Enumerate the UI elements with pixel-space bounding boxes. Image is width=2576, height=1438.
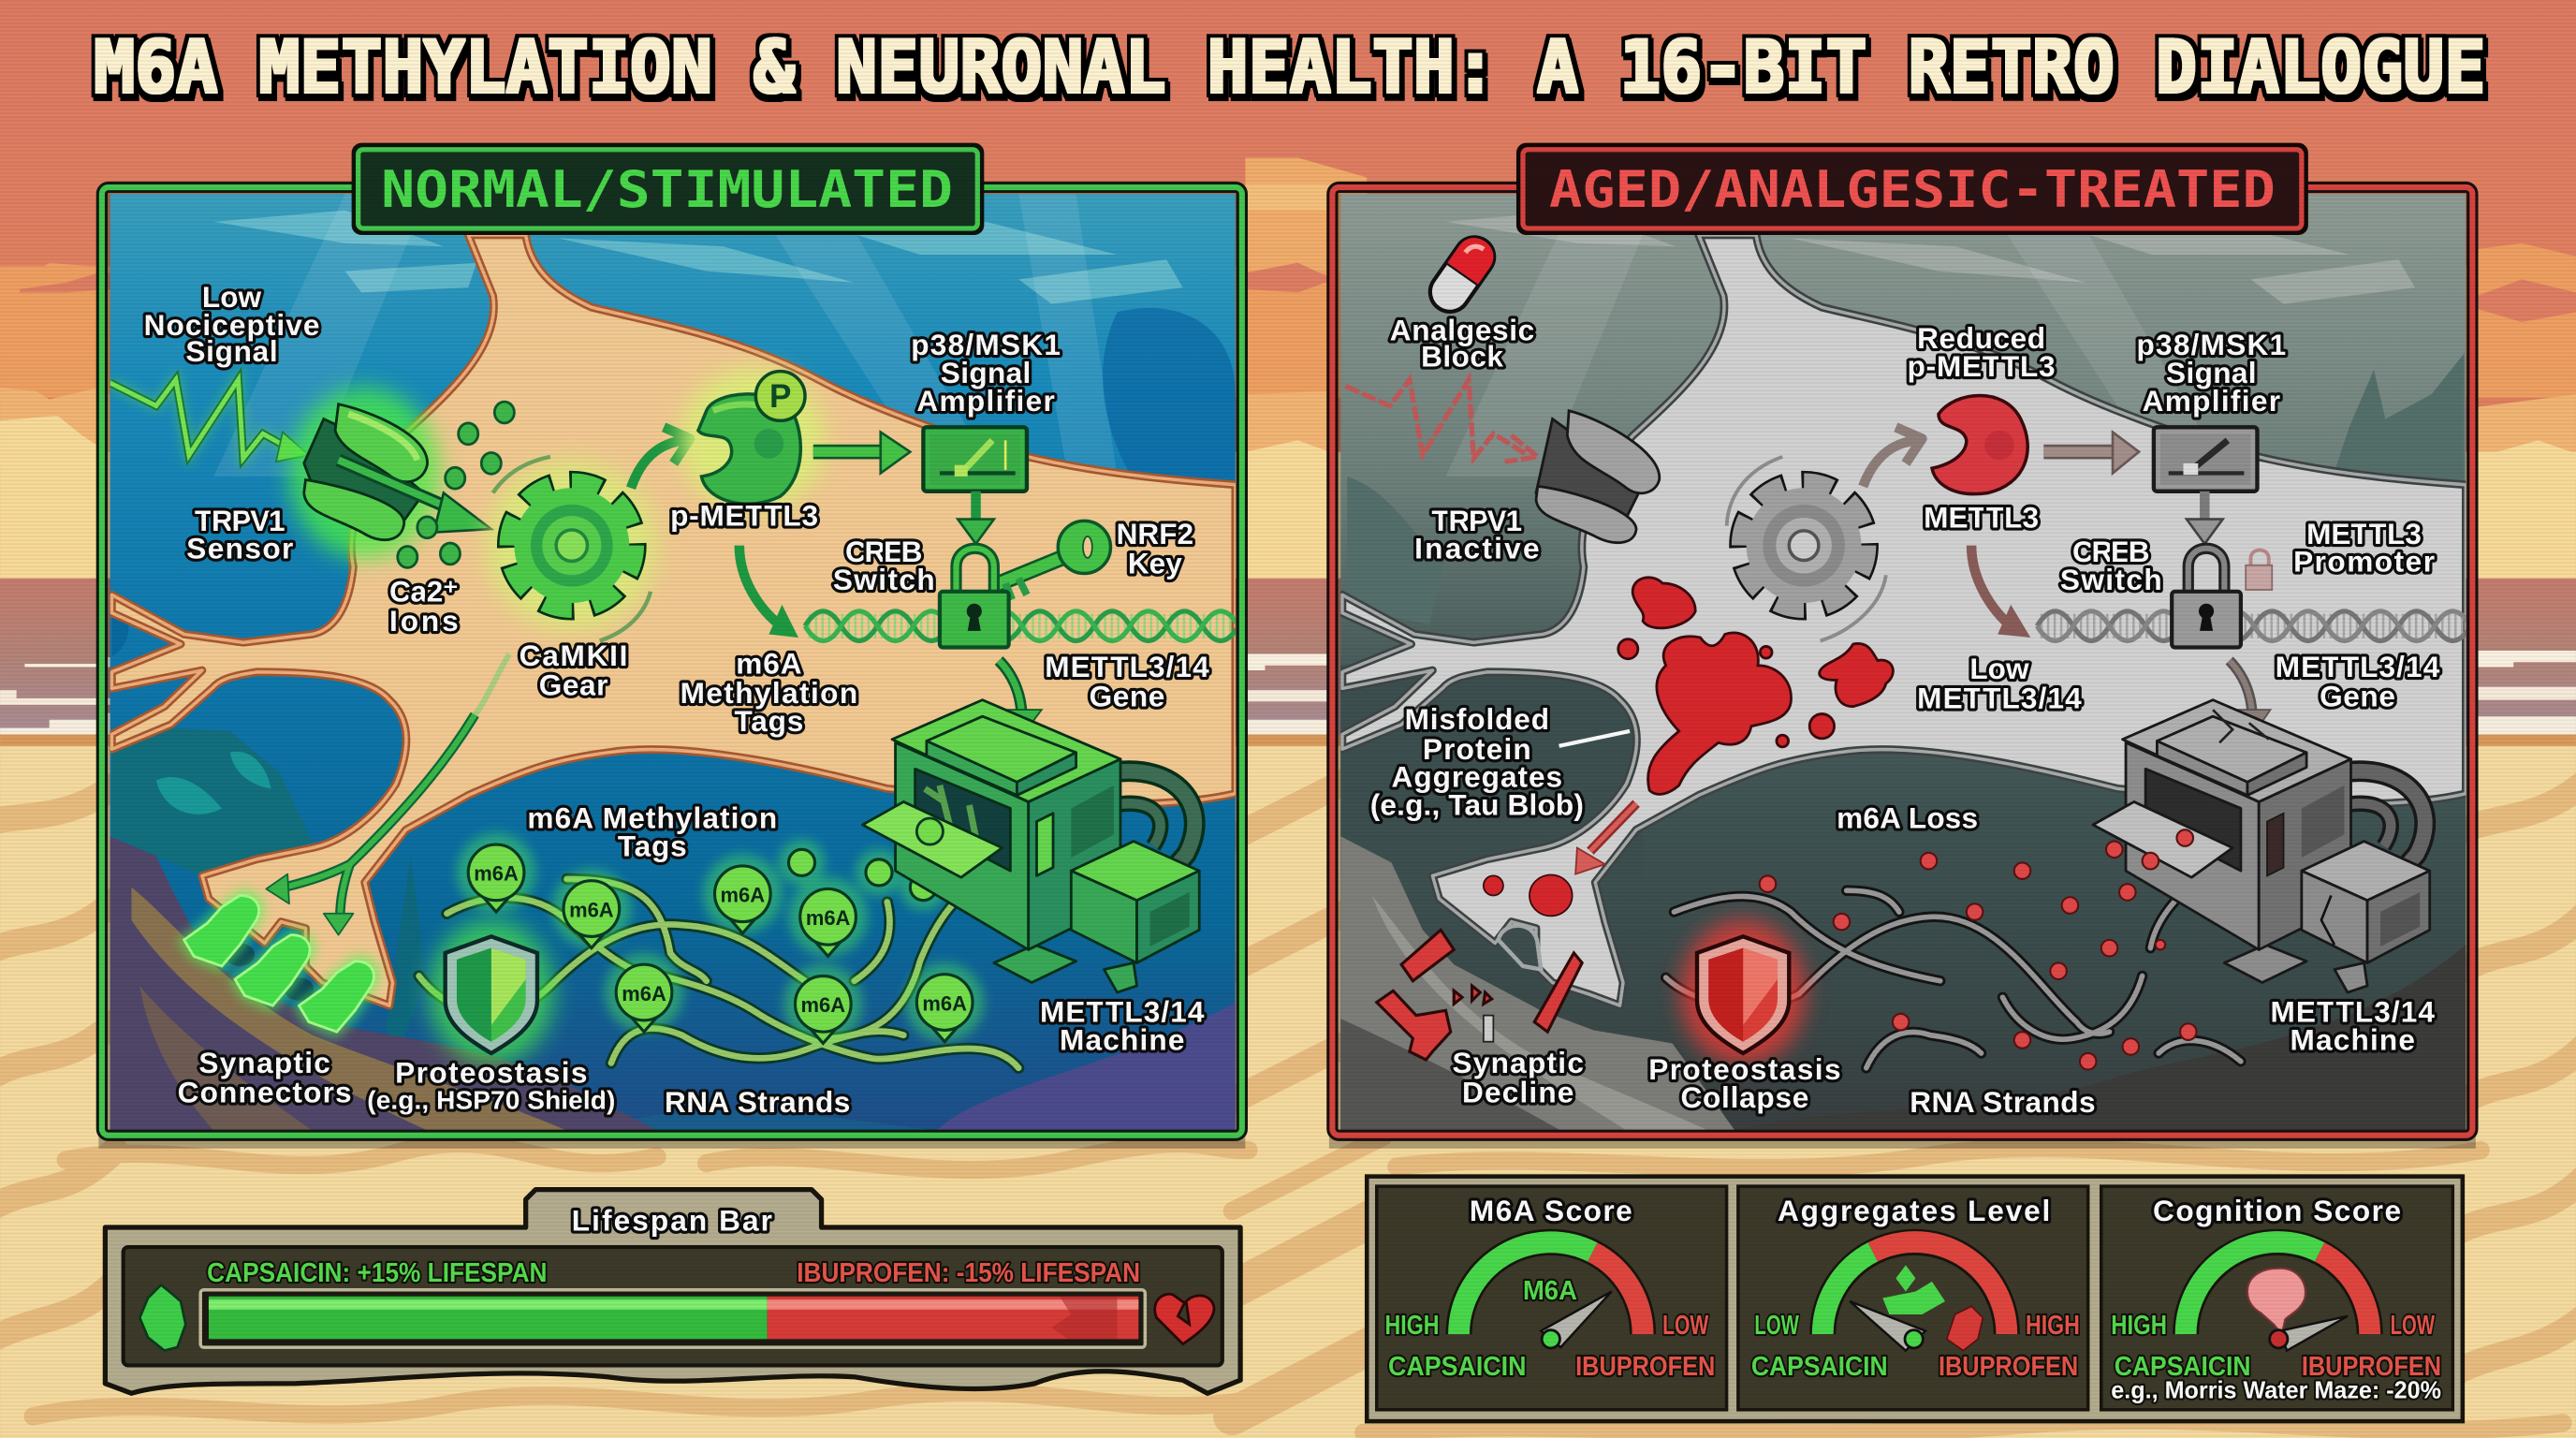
- gauge: cognition score: HIGH: [2111, 1311, 2167, 1341]
- icon: TRPV1 inactive channel: [1536, 411, 1660, 543]
- label: METTL3/14 Gene: METTL3/14: [1045, 650, 1209, 683]
- gauge: M6A score: [1377, 1186, 1727, 1410]
- panel frame: red border: [1332, 187, 2472, 1136]
- label: m6A Methylation Tags: [681, 647, 857, 738]
- icon: CaMKII gear: [487, 457, 657, 640]
- gauge: aggregates level: Aggregates Level: [1778, 1194, 2050, 1227]
- icon: CREB padlock: [940, 549, 1009, 647]
- panel: lifespan bar: [105, 1190, 1240, 1393]
- gauge: M6A score: LOW: [1662, 1311, 1709, 1341]
- label: METTL3/14 Gene: [1045, 650, 1209, 713]
- arrow: METTL3 to amplifier: [2043, 433, 2139, 473]
- label: CREB Switch: [2060, 535, 2162, 596]
- arrow: lock to machine: [999, 661, 1042, 736]
- icon: signal amplifier: [923, 427, 1027, 492]
- label: METTL3/14 Machine: METTL3/14: [2271, 995, 2435, 1029]
- label: Low Nociceptive Signal: Nociceptive: [144, 308, 319, 342]
- arrow: gear to METTL3: [1863, 427, 1922, 486]
- icon: p-METTL3 enzyme: P: [769, 378, 791, 415]
- label: TRPV1 Sensor: Sensor: [186, 532, 293, 565]
- title: M6A METHYLATION & NEURONAL HEALTH: A 16-BIT RETRO DIALOGUE: [94, 25, 2485, 110]
- icon: METTL3/14 machine: [862, 700, 1199, 992]
- label: capsaicin lifespan: CAPSAICIN: +15% LIFESPAN: [207, 1258, 547, 1288]
- gauge: aggregates level: CAPSAICIN: [1751, 1352, 1888, 1382]
- label: Analgesic Block: Block: [1421, 339, 1503, 373]
- gauge: cognition score: CAPSAICIN: [2115, 1352, 2250, 1382]
- arrow: METTL3 to gene: [1971, 546, 2030, 638]
- RNA strands fragmented: [1666, 879, 2241, 1068]
- label: p38/MSK1 Signal Amplifier: Signal: [941, 356, 1031, 389]
- label: METTL3 Promoter: Promoter: [2293, 545, 2435, 579]
- m6A tags: m6A: [721, 884, 765, 907]
- label: p-METTL3: p-METTL3: [670, 499, 818, 533]
- label: METTL3/14 Gene: Gene: [2320, 680, 2395, 713]
- label: METTL3 Promoter: [2293, 517, 2435, 579]
- label: p38/MSK1 Signal Amplifier: p38/MSK1: [2136, 328, 2286, 361]
- label: m6A Loss: m6A Loss: [1837, 801, 1978, 835]
- label: CREB Switch: [833, 535, 935, 596]
- label: Low METTL3/14: Low: [1969, 652, 2029, 685]
- callout: aggregate pointer: [1559, 731, 1630, 746]
- label: Ca2+ Ions: Ca2⁺: [389, 574, 459, 608]
- label: TRPV1 Inactive: [1414, 504, 1540, 565]
- icon: HSP70 shield: [429, 920, 554, 1064]
- label: Misfolded Protein Aggregates: [1370, 702, 1584, 821]
- m6A loss: scattered red dots: [1760, 829, 2197, 1070]
- heading: NORMAL/STIMULATED: NORMAL/STIMULATED: [381, 160, 953, 219]
- neuron body: [111, 235, 1236, 1005]
- label: m6A Methylation Tags: Methylation: [681, 676, 857, 710]
- label: Ca2+ Ions: [389, 574, 459, 638]
- gauge: cognition score: e.g., Morris Water Maze: -20%: [2111, 1378, 2441, 1404]
- label: Proteostasis Collapse: Proteostasis: [1648, 1052, 1841, 1086]
- m6A tags: m6A: [806, 906, 851, 930]
- icon: inactive gear: [1727, 457, 1886, 640]
- icon: misfolded protein aggregates: [1618, 578, 1893, 794]
- label: CaMKII Gear: CaMKII: [520, 638, 627, 672]
- label: METTL3/14 Gene: Gene: [1090, 680, 1164, 713]
- label: m6A Methylation Tags bay: Tags: [618, 829, 687, 862]
- label: CaMKII Gear: Gear: [539, 668, 607, 701]
- label: Synaptic Decline: [1453, 1046, 1584, 1109]
- label: Reduced p-METTL3: p-METTL3: [1908, 349, 2056, 383]
- gauge: M6A score: HIGH: [1385, 1311, 1439, 1341]
- icon: synaptic terminal details: [1484, 875, 1573, 969]
- label: CaMKII Gear: [520, 638, 627, 701]
- gauge: M6A score: CAPSAICIN: [1388, 1352, 1526, 1382]
- label: NRF2 Key: NRF2: [1117, 517, 1193, 550]
- label: p38/MSK1 Signal Amplifier: [911, 328, 1061, 418]
- m6A tags: m6A: [569, 898, 614, 921]
- label: Reduced p-METTL3: [1908, 321, 2056, 383]
- panel: normal/stimulated: [98, 187, 1245, 1149]
- heading: AGED/ANALGESIC-TREATED: [1519, 146, 2305, 231]
- icon: inactive DNA: [2037, 611, 2471, 640]
- m6A tags: m6A: [622, 982, 666, 1005]
- gauge: M6A score: M6A Score: [1470, 1194, 1632, 1227]
- icon: small lock promoter: [2246, 550, 2272, 590]
- label: METTL3/14 Machine: Machine: [2291, 1022, 2415, 1056]
- label: Proteostasis Collapse: [1648, 1052, 1841, 1114]
- label: Proteostasis: [367, 1056, 615, 1115]
- gauge: cognition score: Cognition Score: [2153, 1194, 2401, 1227]
- label: METTL3/14 Gene: [2276, 650, 2440, 713]
- label: Synaptic Connectors: Connectors: [178, 1076, 352, 1109]
- neuron body: [1342, 235, 2466, 1005]
- icon: synaptic connectors: [178, 888, 386, 1038]
- arrow: amplifier to lock: [2187, 492, 2223, 544]
- m6A tags: [457, 833, 984, 1043]
- label: CREB Switch: CREB: [2072, 535, 2150, 568]
- m6A tags: m6A: [801, 993, 845, 1017]
- icon: DNA helix gene: [805, 611, 1238, 640]
- gauge: aggregates level: IBUPROFEN: [1939, 1352, 2078, 1382]
- label: CREB Switch: CREB: [845, 535, 923, 568]
- panel: aged/analgesic-treated: [1329, 187, 2476, 1149]
- gauge: aggregates level: [1738, 1186, 2088, 1410]
- icon: padlock: [2172, 549, 2241, 647]
- arrow: m6A tags: [739, 546, 798, 638]
- icon: healthy heart: [139, 1284, 185, 1351]
- label: p38/MSK1 Signal Amplifier: Amplifier: [916, 384, 1055, 418]
- label: Proteostasis: (e.g., HSP70 Shield): [367, 1086, 615, 1115]
- icon: NRF2 key: [996, 521, 1110, 600]
- icon: inactive amplifier: [2154, 427, 2257, 492]
- label: m6A Methylation Tags bay: m6A Methylation: [527, 801, 777, 835]
- signal zigzag: [110, 379, 309, 462]
- m6A tags: m6A: [474, 862, 519, 886]
- label: Misfolded Protein Aggregates: (e.g., Tau Blob): [1370, 787, 1584, 821]
- icon: METTL3 enzyme: [1932, 396, 2027, 494]
- label: p38/MSK1 Signal Amplifier: Amplifier: [2143, 384, 2280, 418]
- gauge: aggregates level: HIGH: [2026, 1311, 2080, 1341]
- lifespan bar chart: [200, 1290, 1145, 1347]
- label: TRPV1 Sensor: TRPV1: [195, 504, 285, 537]
- panel: gauges: [1367, 1177, 2463, 1421]
- label: Misfolded Protein Aggregates: Protein: [1423, 732, 1531, 766]
- arrow: p-METTL3 to amplifier: [813, 433, 910, 473]
- label: TRPV1 Inactive: Inactive: [1414, 532, 1540, 565]
- arrow: axon to synapses: [266, 654, 509, 935]
- label: TRPV1 Sensor: [186, 504, 293, 565]
- label: p38/MSK1 Signal Amplifier: p38/MSK1: [911, 328, 1061, 361]
- label: METTL3/14 Machine: [2271, 995, 2435, 1056]
- arrow: channel to gear: [339, 460, 491, 533]
- label: METTL3/14 Machine: Machine: [1060, 1022, 1184, 1056]
- label: ibuprofen lifespan: IBUPROFEN: -15% LIFESPAN: [797, 1258, 1140, 1288]
- m6A tags: m6A: [922, 991, 967, 1015]
- heading: AGED/ANALGESIC-TREATED: AGED/ANALGESIC-TREATED: [1549, 160, 2276, 219]
- label: NRF2 Key: Key: [1128, 547, 1182, 580]
- label: CREB Switch: Switch: [833, 563, 935, 596]
- icon: p-METTL3 enzyme: [681, 368, 825, 513]
- label: Low Nociceptive Signal: [144, 280, 319, 368]
- icon: analgesic pill: [1423, 229, 1501, 319]
- label: NRF2 Key: [1117, 517, 1193, 580]
- gauge: M6A score: M6A: [1523, 1276, 1577, 1306]
- label: Analgesic Block: Analgesic: [1390, 313, 1534, 346]
- label: Lifespan Bar: Lifespan Bar: [572, 1204, 772, 1238]
- label: METTL3 Promoter: METTL3: [2306, 517, 2422, 550]
- signal zigzag faded: [1345, 379, 1538, 462]
- label: RNA Strands: RNA Strands: [1910, 1085, 2096, 1119]
- label: m6A Methylation Tags: Tags: [735, 704, 803, 738]
- gauge: cognition score: LOW: [2391, 1311, 2435, 1341]
- label: Proteostasis: Proteostasis: [395, 1056, 587, 1090]
- gauge: M6A score: IBUPROFEN: [1575, 1352, 1715, 1382]
- label: TRPV1 Inactive: TRPV1: [1432, 504, 1522, 537]
- heading: NORMAL/STIMULATED: [355, 146, 981, 231]
- label: p38/MSK1 Signal Amplifier: Signal: [2166, 356, 2257, 389]
- label: m6A Methylation Tags: m6A: [736, 647, 802, 681]
- label: Misfolded Protein Aggregates: Misfolded: [1405, 702, 1549, 736]
- label: Low Nociceptive Signal: Low: [202, 280, 262, 314]
- icon: damaged machine: [2093, 700, 2430, 992]
- label: m6A Methylation Tags bay: [527, 801, 777, 862]
- label: Synaptic Connectors: [178, 1046, 352, 1109]
- arrow: gear to p-METTL3: [631, 427, 690, 488]
- icon: broken synaptic connectors: [1377, 930, 1582, 1060]
- arrow: lock to machine: [2230, 661, 2271, 736]
- label: Low METTL3/14: METTL3/14: [1917, 681, 2082, 714]
- label: Low Nociceptive Signal: Signal: [185, 334, 278, 368]
- label: METTL3: METTL3: [1924, 500, 2039, 534]
- label: METTL3/14 Machine: METTL3/14: [1040, 995, 1205, 1029]
- arrow: aggregates to synapse: [1575, 803, 1636, 874]
- arrow: amplifier to lock: [958, 492, 994, 544]
- icon: brain: [2247, 1269, 2305, 1334]
- icon: TRPV1 channel: [289, 388, 440, 559]
- icon: calcium ions: [398, 402, 514, 567]
- label: METTL3/14 Machine: [1040, 995, 1205, 1056]
- label: Low METTL3/14: [1917, 652, 2082, 714]
- RNA strands: [419, 879, 1018, 1068]
- label: Synaptic Decline: Decline: [1462, 1076, 1573, 1109]
- label: Ca2+ Ions: Ions: [389, 604, 459, 638]
- label: METTL3/14 Gene: METTL3/14: [2276, 650, 2440, 683]
- label: p38/MSK1 Signal Amplifier: [2136, 328, 2286, 418]
- label: Misfolded Protein Aggregates: Aggregates: [1392, 760, 1562, 794]
- icon: collapsing red shield: [1680, 920, 1806, 1064]
- icon: broken heart: [1155, 1294, 1214, 1344]
- label: Synaptic Decline: Synaptic: [1453, 1046, 1584, 1079]
- label: Reduced p-METTL3: Reduced: [1917, 321, 2045, 355]
- gauge: aggregates level: LOW: [1754, 1311, 1799, 1341]
- panel frame: green border: [102, 187, 1242, 1136]
- label: Proteostasis Collapse: Collapse: [1680, 1080, 1808, 1114]
- label: Synaptic Connectors: Synaptic: [198, 1046, 330, 1079]
- label: RNA Strands: RNA Strands: [665, 1085, 850, 1119]
- label: Analgesic Block: [1390, 313, 1534, 373]
- label: CREB Switch: Switch: [2060, 563, 2162, 596]
- gauge: cognition score: [2101, 1186, 2452, 1410]
- gauge: cognition score: IBUPROFEN: [2302, 1352, 2441, 1382]
